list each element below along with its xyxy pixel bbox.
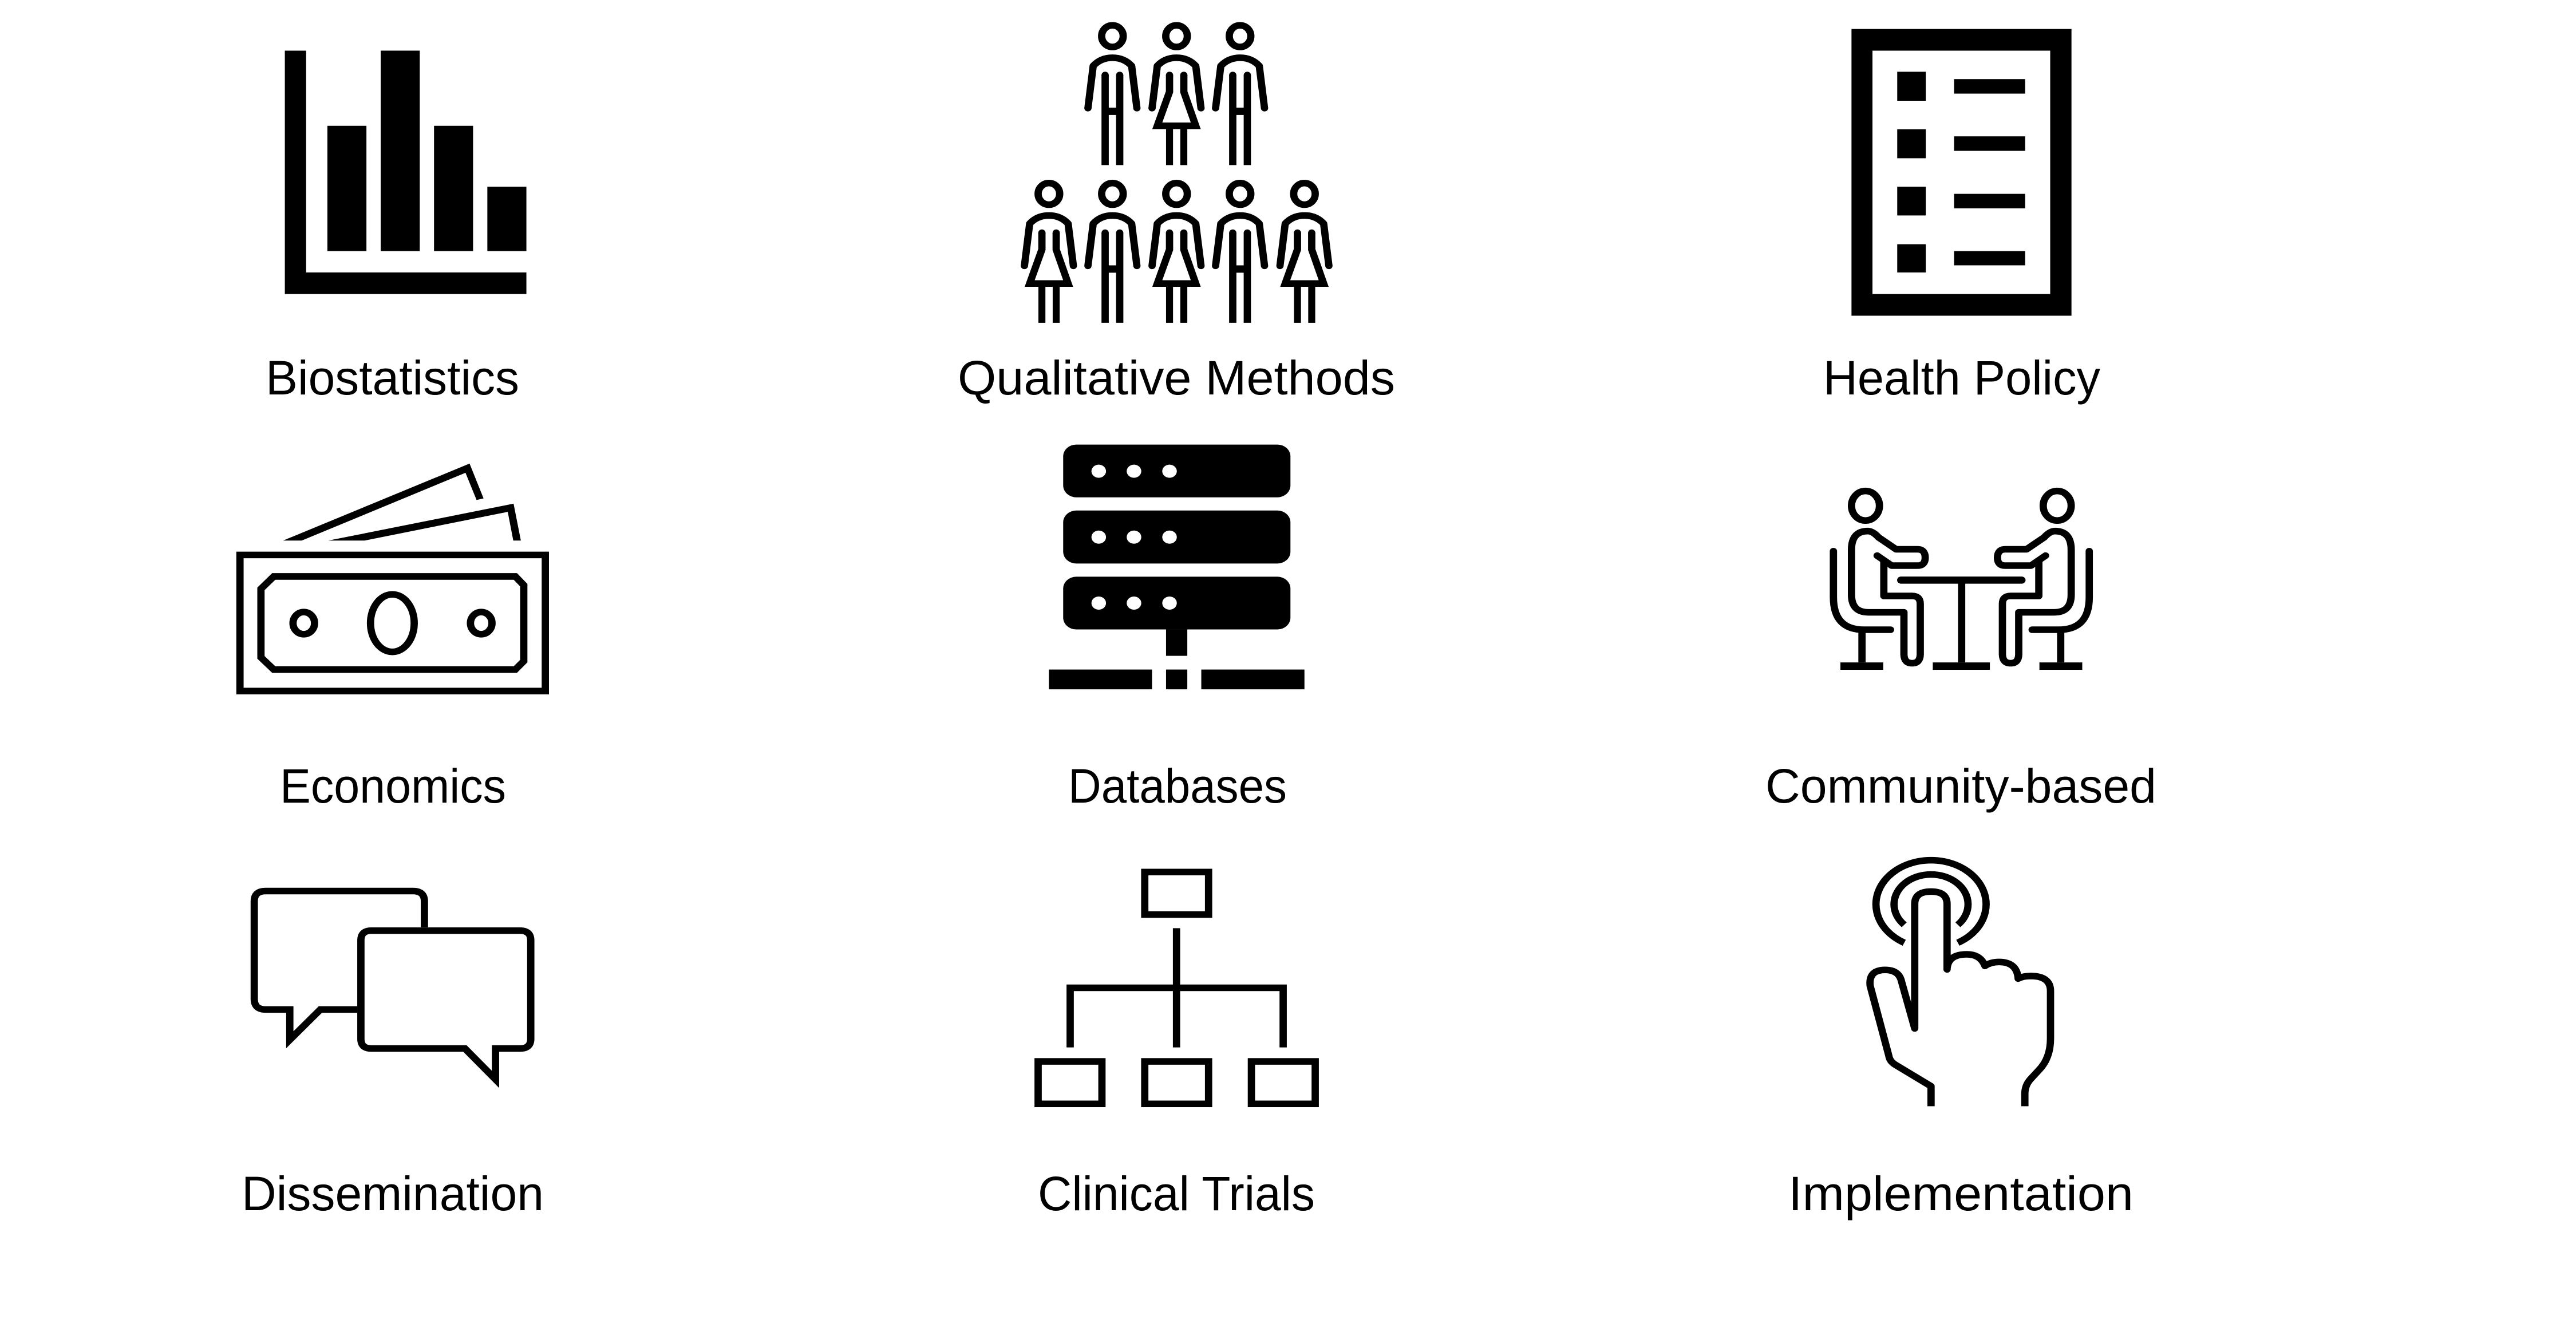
label: Clinical Trials: Clinical Trials — [1038, 1167, 1315, 1221]
panel: Health Policy — [1823, 29, 2100, 405]
panel: Biostatistics — [266, 50, 527, 405]
icon: server stack — [1049, 445, 1305, 689]
panel: Economics — [240, 464, 546, 813]
icon: banknotes — [240, 464, 546, 691]
label: Community-based: Community-based — [1765, 759, 2156, 813]
icon: hand tapping — [1870, 860, 2050, 1106]
panel: Clinical Trials — [1038, 872, 1315, 1221]
label: Qualitative Methods: Qualitative Methods — [958, 351, 1395, 405]
panel: Community-based — [1765, 491, 2156, 813]
icon: hierarchy diagram — [1038, 872, 1315, 1104]
panel: Implementation — [1788, 860, 2134, 1221]
panel: Dissemination — [242, 891, 544, 1221]
panel: Databases — [1049, 445, 1305, 813]
icon: checklist document — [1851, 29, 2072, 315]
label: Biostatistics: Biostatistics — [266, 351, 519, 405]
label: Implementation: Implementation — [1788, 1167, 2134, 1221]
label: Economics: Economics — [280, 759, 506, 813]
label: Databases: Databases — [1068, 759, 1287, 813]
label: Health Policy: Health Policy — [1823, 351, 2100, 405]
label: Dissemination: Dissemination — [242, 1167, 544, 1221]
icon: two people at table — [1834, 491, 2089, 670]
icon: speech bubbles — [254, 891, 531, 1079]
icon: group of people — [1025, 25, 1329, 323]
panel: Qualitative Methods — [958, 25, 1395, 405]
icon: bar chart — [285, 50, 527, 294]
